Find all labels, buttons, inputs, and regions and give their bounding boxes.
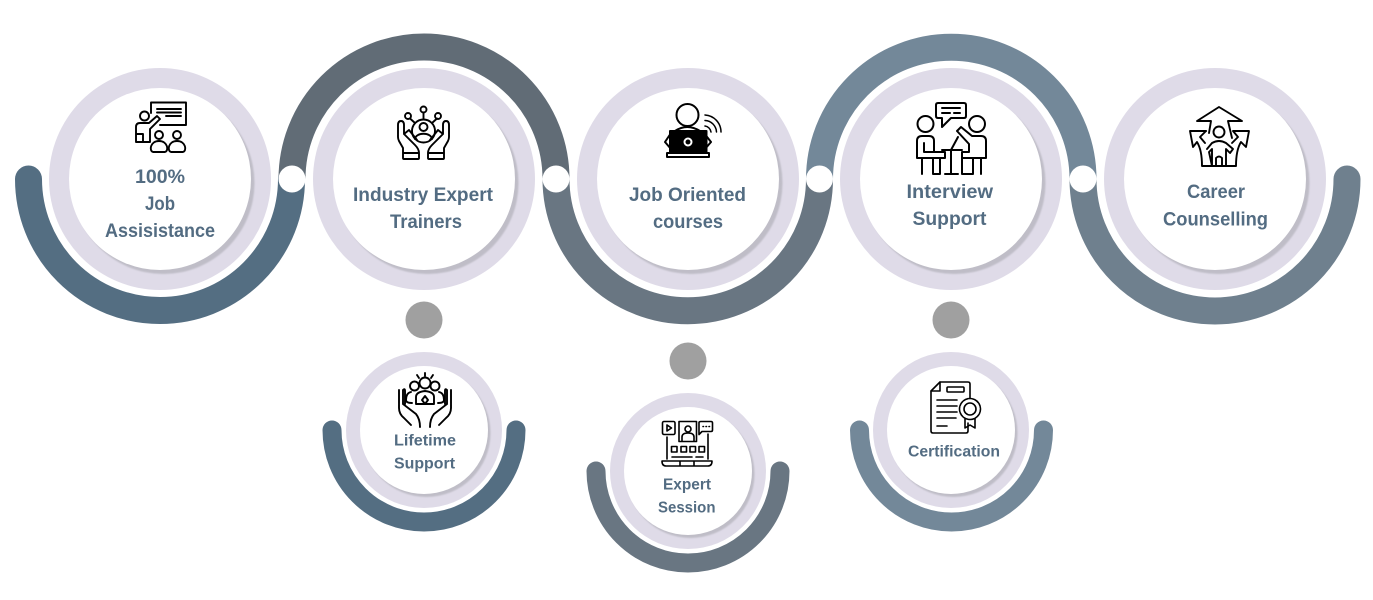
heading: Interview Support: Support	[912, 209, 987, 230]
panel: Lifetime Support	[332, 352, 516, 522]
heading: Career Counselling: Counselling	[1163, 210, 1268, 230]
heading: Industry Expert Trainers: Trainers	[390, 212, 462, 233]
heading: Job Oriented courses: courses	[653, 212, 723, 233]
heading: Job Oriented courses	[629, 185, 746, 233]
arc: Lifetime Support cradle	[332, 430, 516, 522]
panel: Certification	[860, 352, 1044, 522]
icon: person at laptop with wifi	[665, 104, 721, 157]
connector dot: Certification	[932, 302, 970, 338]
arc: third lower wave segment	[556, 179, 820, 311]
heading: Job Oriented courses: Job Oriented	[629, 185, 746, 206]
panel: Job Oriented courses	[577, 68, 799, 290]
icon: hands holding network person	[398, 106, 449, 159]
heading: Industry Expert Trainers	[353, 185, 494, 233]
heading: Career Counselling	[1163, 182, 1268, 230]
icon: presenter with audience	[136, 102, 186, 152]
icon: person with three arrows	[1190, 107, 1249, 166]
connector dot: Expert Session	[670, 342, 706, 380]
connector dots on the wave	[278, 166, 1096, 192]
arc: Expert Session cradle	[596, 471, 780, 563]
heading: Certification: Certification	[908, 444, 1000, 460]
arc: fifth lower wave segment	[1083, 179, 1347, 311]
heading: Interview Support	[906, 182, 993, 230]
heading: Career Counselling: Career	[1187, 182, 1246, 203]
heading: Expert Session: Session	[658, 500, 716, 516]
heading: Interview Support: Interview	[906, 182, 993, 203]
heading: 100% Job Assisistance	[105, 167, 215, 242]
heading: Lifetime Support: Lifetime	[394, 432, 456, 450]
icon: laptop with video session	[662, 422, 712, 466]
panel: 100% Job Assisistance	[49, 68, 271, 290]
connector dot: Lifetime Support	[406, 302, 442, 338]
arc: Certification cradle	[860, 430, 1044, 522]
arc: fourth upper wave segment	[820, 47, 1083, 179]
icon: hands holding group	[399, 373, 451, 427]
heading: Lifetime Support: Support	[394, 456, 455, 472]
heading: Expert Session: Expert	[663, 476, 711, 494]
panel: Expert Session	[596, 393, 780, 563]
icon: certificate with seal	[931, 382, 980, 433]
heading: 100% Job Assisistance: Job	[145, 194, 175, 215]
heading: 100% Job Assisistance: Assisistance	[105, 221, 215, 242]
arc: first lower wave segment	[28, 179, 292, 310]
heading: Lifetime Support	[394, 432, 456, 472]
panel: Interview Support	[840, 68, 1062, 290]
panel: Industry Expert Trainers	[313, 68, 535, 290]
heading: 100% Job Assisistance: 100%	[135, 167, 185, 188]
panel: Career Counselling	[1104, 68, 1326, 290]
heading: Expert Session	[658, 476, 716, 516]
heading: Industry Expert Trainers: Industry Expert	[353, 185, 494, 206]
arc: second upper wave segment	[292, 47, 556, 179]
icon: two people in conversation	[917, 103, 986, 174]
